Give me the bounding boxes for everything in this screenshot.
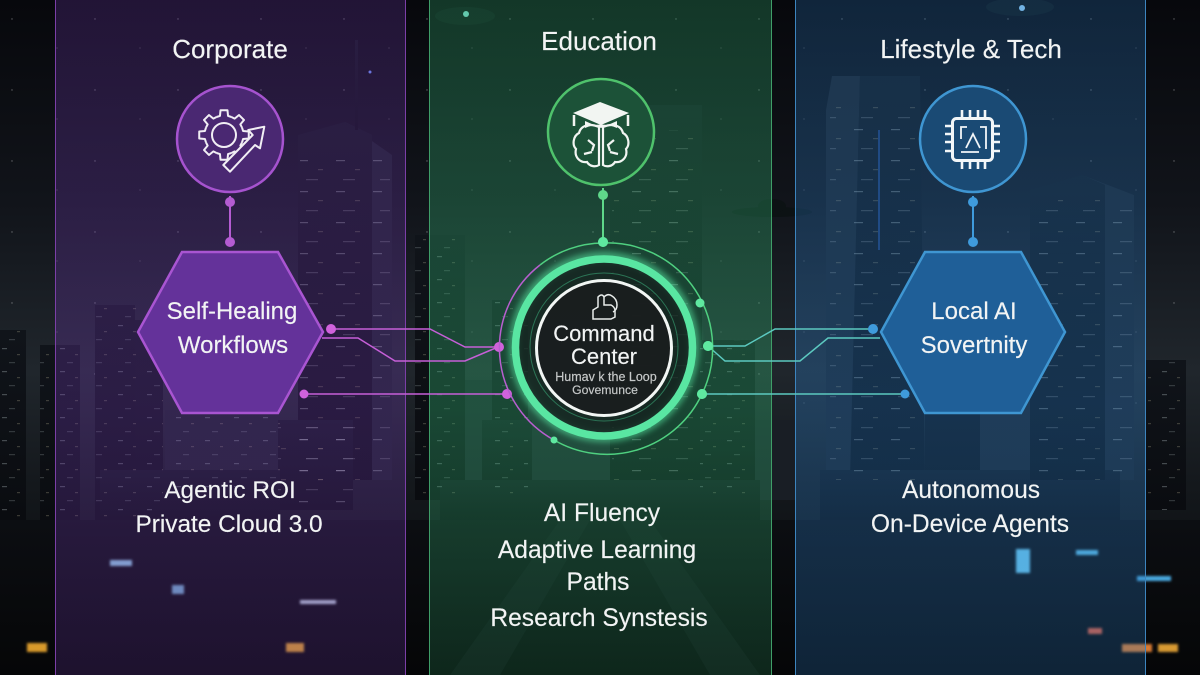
hexagon: Self-Healing Workflows: Self-Healing [167,298,297,325]
list: lifestyle items: Autonomous [902,477,1040,504]
heading: Lifestyle & Tech: Lifestyle & Tech [880,34,1062,64]
connector: corporate icon to hexagon [225,196,235,247]
list: education items: Paths [567,569,629,596]
heading: Education: Education [541,26,657,56]
hub: command center: Center [571,344,637,369]
icon: AI chip [920,86,1026,192]
connector: lifestyle icon to hexagon [968,196,978,247]
hexagon: Self-Healing Workflows [138,252,323,413]
ufo silhouettes [435,0,1054,217]
list: corporate items: Agentic ROI [164,477,296,504]
hub: command center [499,237,713,454]
hexagon: Local AI Sovertnity: Local AI [931,298,1017,325]
panel: lifestyle and tech band [796,0,1146,675]
list: corporate items: Private Cloud 3.0 [135,511,323,538]
list: education items [490,500,708,632]
hub: command center: Humav k the Loop [555,370,657,384]
panel: corporate band [56,0,406,675]
list: lifestyle items [871,477,1069,538]
connectors: corporate to command center [300,324,512,399]
panel: education band [430,0,772,675]
connector: education icon to hub [598,188,608,247]
icon: gear with rising arrow [177,86,283,192]
hexagon: Local AI Sovertnity: Sovertnity [921,332,1027,359]
icon: touch hand [593,295,617,319]
hub: command center: Command [553,321,655,346]
hexagon: Local AI Sovertnity [881,252,1065,413]
list: education items: Research Synstesis [490,605,708,632]
icon: graduation cap over brain [548,79,654,185]
heading: Corporate: Corporate [172,34,288,64]
connectors: lifestyle to command center [697,324,910,399]
list: education items: Adaptive Learning [498,537,696,564]
list: education items: AI Fluency [544,500,661,527]
list: corporate items [135,477,323,538]
list: lifestyle items: On-Device Agents [871,511,1069,538]
hub: command center: Govemunce [572,383,638,397]
hexagon: Self-Healing Workflows: Workflows [178,332,288,359]
